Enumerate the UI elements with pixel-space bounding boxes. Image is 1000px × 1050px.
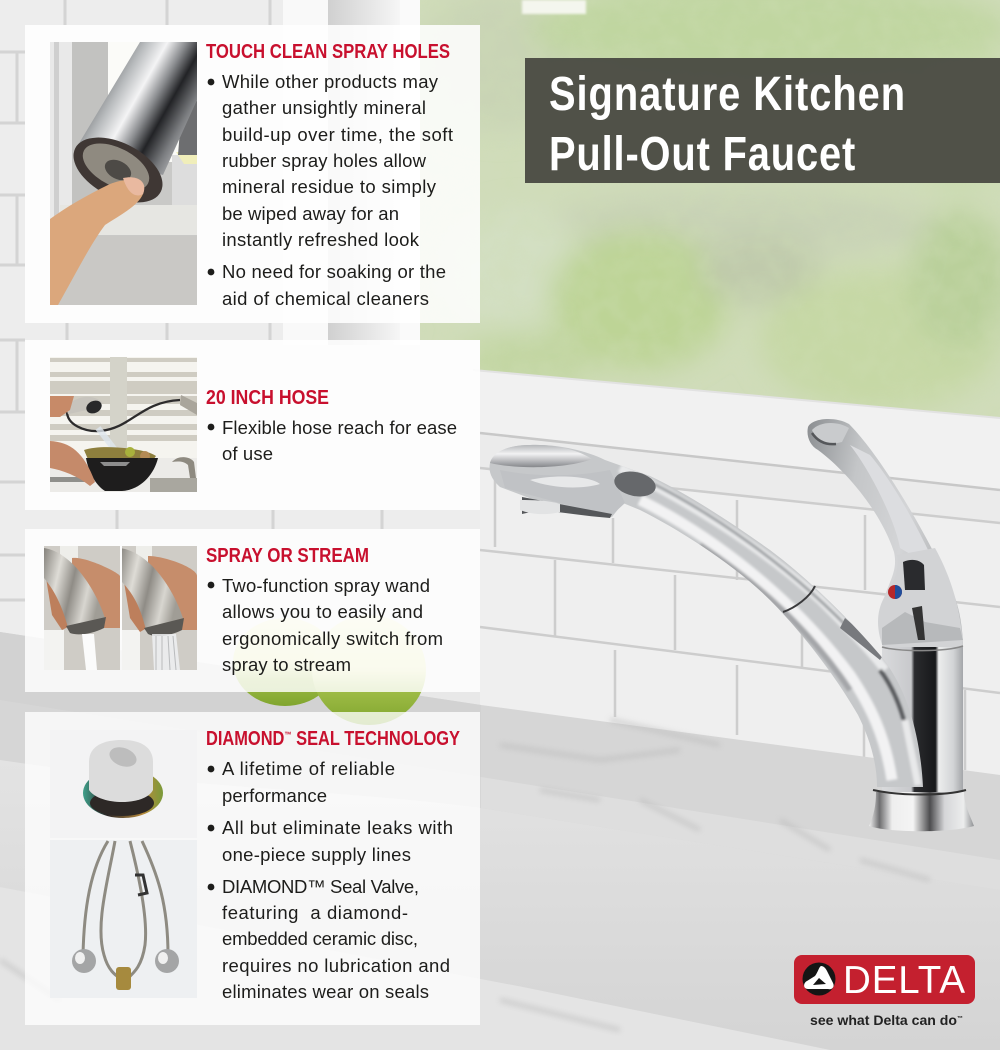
heading: DIAMOND	[206, 727, 304, 750]
faucet	[480, 419, 974, 831]
bullet list: build-up over time, the soft	[222, 124, 453, 145]
bullet list: embedded ceramic disc,	[222, 928, 418, 949]
left tile wall	[0, 0, 480, 640]
bullet list: gather unsightly mineral	[222, 97, 426, 118]
bullet list: be wiped away for an	[222, 203, 399, 224]
apples	[233, 615, 426, 725]
bullet list: of use	[222, 443, 273, 464]
spout ring	[783, 586, 815, 612]
temperature indicator	[888, 585, 902, 599]
bullet list: eliminates wear on seals	[222, 981, 429, 1002]
panel: diamond seal technology	[25, 712, 480, 1025]
bullet list: requires no lubrication and	[222, 955, 450, 976]
heading: SPRAY OR STREAM	[206, 544, 369, 567]
marble counter	[0, 632, 1000, 1050]
bullet list: allows you to easily and	[222, 601, 423, 622]
bullet list: DIAMOND™ Seal Valve,	[222, 876, 419, 897]
bullet list: A lifetime of reliable	[222, 758, 395, 779]
bullet list	[208, 71, 453, 309]
panel: 20 inch hose	[25, 340, 480, 510]
logo: Delta	[794, 955, 975, 1028]
bullet list	[208, 417, 457, 464]
spout and spray wand	[480, 440, 930, 790]
heading: SEAL TECHNOLOGY	[292, 727, 460, 750]
panel: touch clean spray holes	[25, 25, 480, 323]
faucet hub	[879, 548, 963, 650]
bullet list: performance	[222, 785, 327, 806]
title banner	[525, 58, 1000, 183]
bullet list: ergonomically switch from	[222, 628, 443, 649]
window view: blurred trees	[420, 0, 1000, 420]
subway tile backsplash	[480, 468, 1000, 800]
bullet list: rubber spray holes allow	[222, 150, 427, 171]
photo: one-piece supply lines	[50, 840, 197, 998]
spray button	[612, 468, 658, 500]
bullet list: While other products may	[222, 71, 439, 92]
window sill	[420, 365, 1000, 530]
bullet list: No need for soaking or the	[222, 261, 446, 282]
bullet list: Flexible hose reach for ease	[222, 417, 457, 438]
bullet list: instantly refreshed look	[222, 229, 420, 250]
bullet list: aid of chemical cleaners	[222, 288, 429, 309]
title banner: Pull-Out Faucet	[549, 128, 856, 181]
heading: 20 INCH HOSE	[206, 386, 329, 409]
bullet list	[208, 575, 443, 675]
photo: finger wiping spray holes	[50, 42, 197, 305]
bullet list: one-piece supply lines	[222, 844, 411, 865]
panel: spray or stream	[25, 529, 480, 692]
icon: Delta emblem	[802, 962, 836, 996]
photo: pull-out hose over a bowl of salad	[50, 357, 197, 492]
faucet base	[869, 792, 974, 831]
bullet list: All but eliminate leaks with	[222, 817, 453, 838]
bullet list	[208, 758, 453, 1002]
heading: TOUCH CLEAN SPRAY HOLES	[206, 40, 450, 63]
title banner: Signature Kitchen	[549, 68, 905, 121]
heading: ™	[284, 730, 292, 740]
logo: Delta: see what Delta can do	[810, 1012, 956, 1028]
bullet list: featuring a diamond-	[222, 902, 408, 923]
logo: Delta: ™	[957, 1015, 963, 1022]
bullet list: Two-function spray wand	[222, 575, 430, 596]
faucet handle lever	[807, 419, 963, 650]
logo: Delta: DELTA	[843, 959, 965, 1002]
bullet list: mineral residue to simply	[222, 176, 437, 197]
spray head	[490, 445, 625, 518]
photo: diamond seal valve	[50, 730, 197, 838]
photo: spray setting	[120, 546, 197, 670]
bullet list: spray to stream	[222, 654, 351, 675]
photo: stream setting	[44, 546, 120, 670]
faucet body cylinder	[882, 647, 963, 792]
